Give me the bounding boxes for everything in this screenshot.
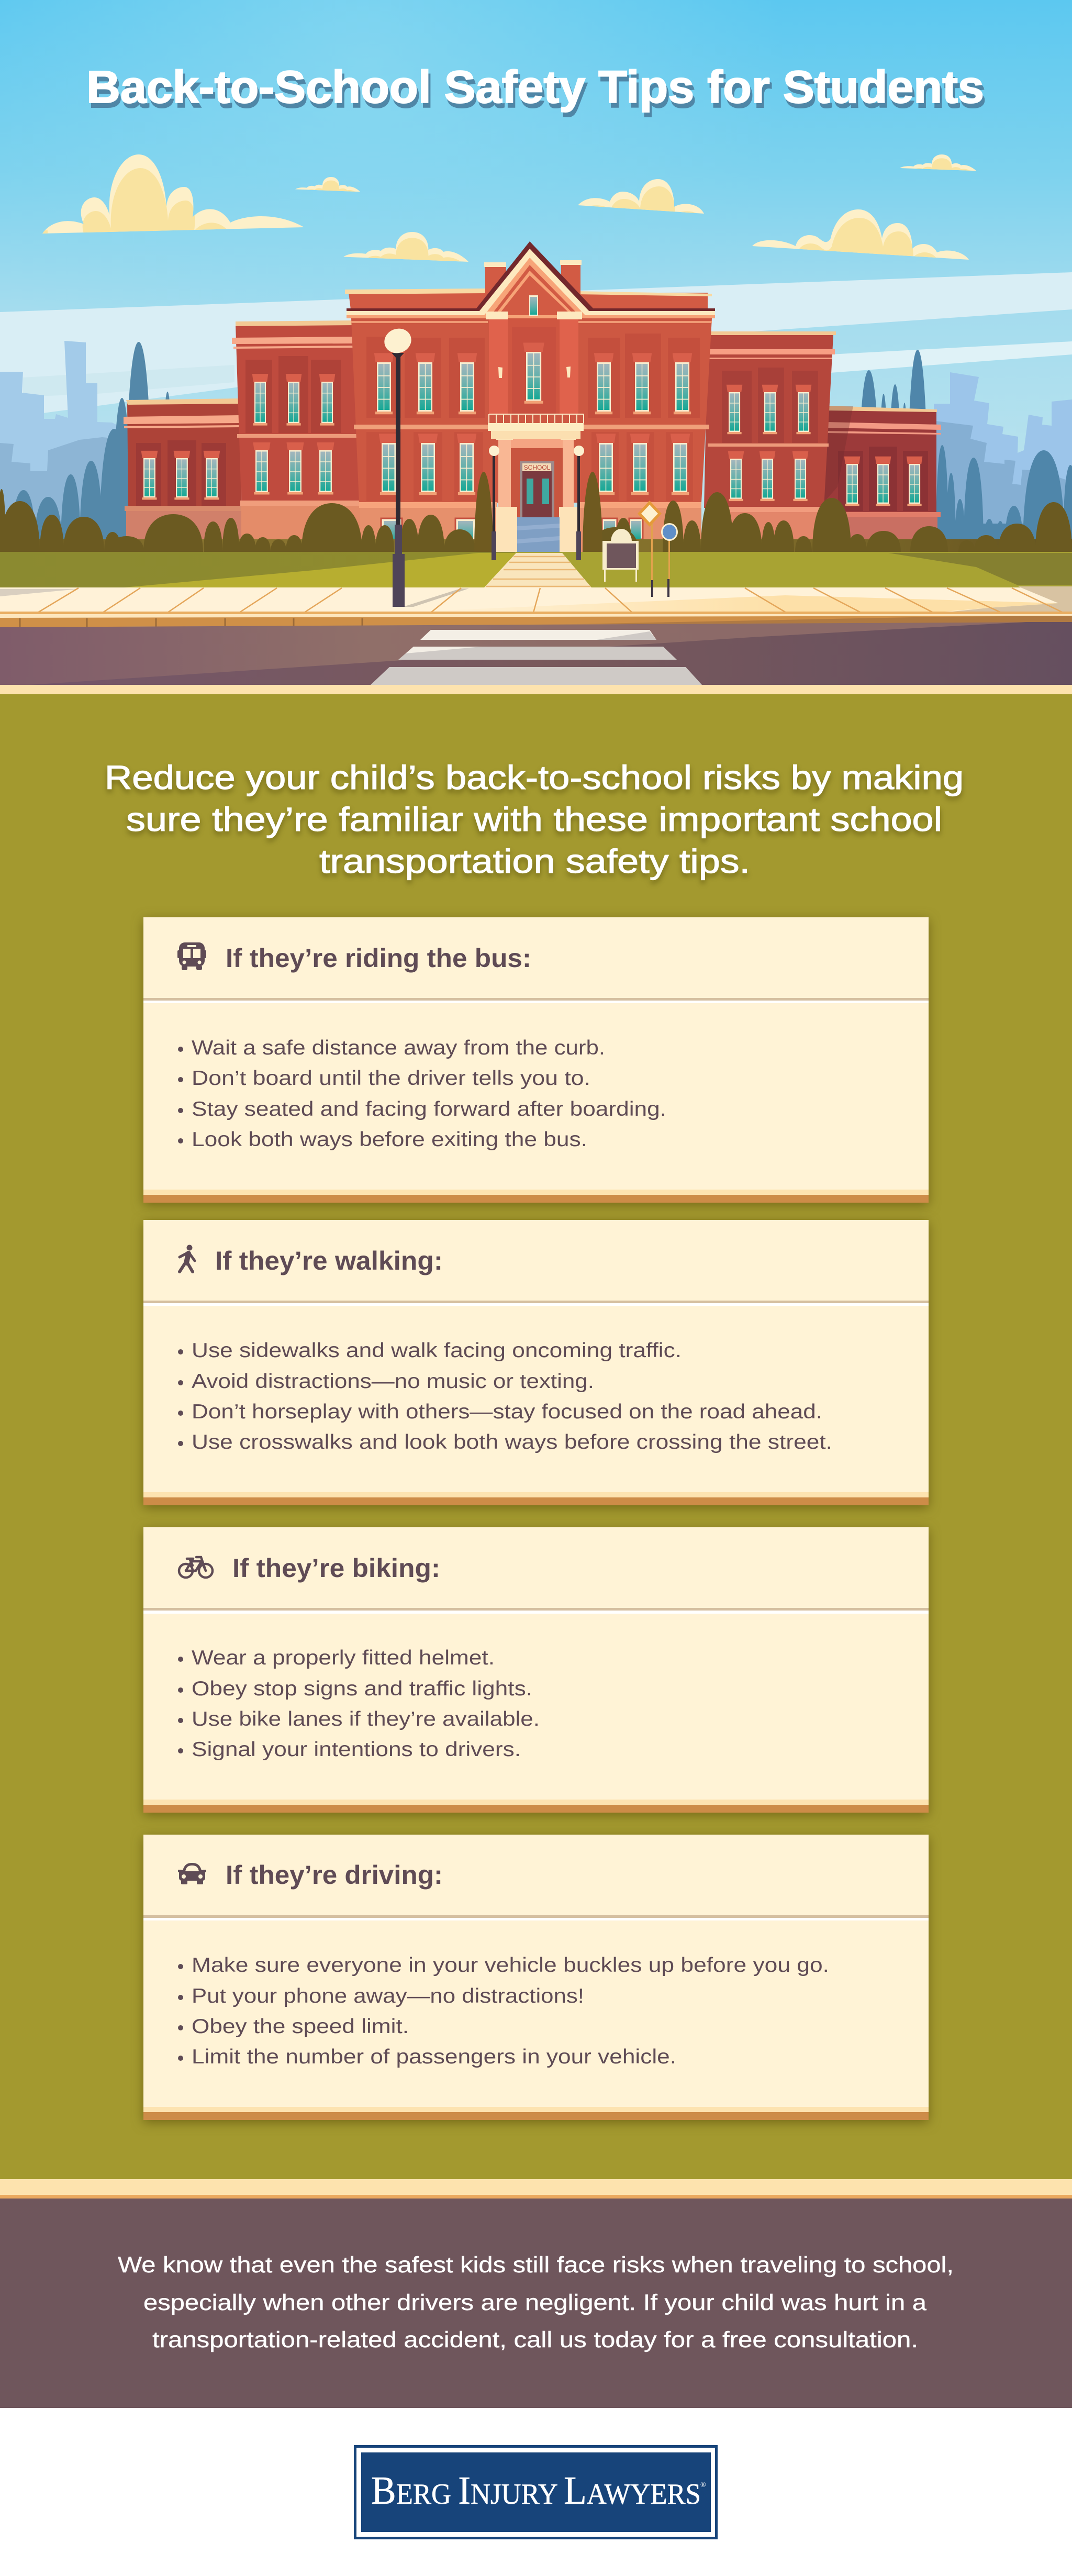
panel: biking [143, 1527, 929, 1813]
tips list: Stay seated and facing forward after boarding. [192, 1098, 666, 1120]
icon: car [178, 1863, 206, 1884]
heading: If they’re walking: [215, 1246, 443, 1275]
closing text [118, 2252, 954, 2352]
tips list: Use sidewalks and walk facing oncoming traffic. [192, 1339, 682, 1362]
heading: If they’re riding the bus: [226, 943, 531, 973]
sidewalk and curb [0, 586, 1072, 627]
tips list: Wait a safe distance away from the curb. [192, 1037, 605, 1059]
tips list: Look both ways before exiting the bus. [192, 1128, 587, 1151]
tips list: Avoid distractions—no music or texting. [192, 1370, 594, 1393]
intro text [105, 759, 964, 880]
tips list [178, 1037, 666, 1151]
logo: Berg Injury Lawyers: BERG INJURY LAWYERS [371, 2469, 701, 2513]
heading: If they’re driving: [226, 1860, 443, 1890]
door with school sign: SCHOOL [524, 464, 551, 471]
tips list: Make sure everyone in your vehicle buckles up before you go. [192, 1954, 829, 1977]
balcony railing [489, 414, 584, 423]
tips list: Limit the number of passengers in your vehicle. [192, 2046, 676, 2068]
tips list: Obey the speed limit. [192, 2015, 409, 2038]
cloud: small upper left [295, 177, 360, 192]
tips list: Don’t horseplay with others—stay focused on the road ahead. [192, 1401, 822, 1423]
door with school sign [520, 461, 554, 517]
cloud: large right [752, 209, 969, 260]
logo: Berg Injury Lawyers: ® [700, 2481, 706, 2489]
heading: If they’re biking: [232, 1553, 440, 1583]
gable [474, 241, 596, 319]
intro text: Reduce your child’s back-to-school risks by making [105, 759, 964, 796]
cloud: lower centre [343, 232, 468, 262]
cream divider band below hero [0, 685, 1072, 694]
tips list: Use bike lanes if they’re available. [192, 1708, 540, 1730]
title: Back-to-School Safety Tips for Students [86, 62, 984, 113]
tips list [178, 1954, 829, 2068]
building: central block [345, 241, 715, 552]
tips list: Use crosswalks and look both ways before crossing the street. [192, 1431, 832, 1453]
lawn [0, 552, 1072, 589]
skyline: left [0, 341, 136, 552]
closing text: transportation-related accident, call us today for a free consultation. [152, 2327, 918, 2352]
closing text: especially when other drivers are negligent. If your child was hurt in a [143, 2290, 926, 2315]
lamp posts [381, 325, 584, 607]
icon: bicycle [179, 1557, 213, 1578]
footer call-to-action panel [0, 2199, 1072, 2408]
building: middle left wing [232, 320, 366, 552]
tips list: Don’t board until the driver tells you to. [192, 1067, 590, 1090]
closing text: We know that even the safest kids still face risks when traveling to school, [118, 2252, 954, 2278]
entrance portico [488, 414, 584, 552]
building: middle right wing [704, 331, 836, 552]
panel: riding the bus [143, 917, 929, 1203]
cloud: middle [578, 179, 704, 214]
windows [141, 342, 922, 542]
signs: notice board, diamond and round signs [602, 501, 678, 597]
olive content background [0, 694, 1072, 2179]
shrubs [0, 472, 1072, 634]
tips list: Put your phone away—no distractions! [192, 1985, 584, 2007]
tips list: Obey stop signs and traffic lights. [192, 1678, 532, 1700]
walkway [484, 553, 591, 587]
cypress trees by entrance [474, 472, 602, 552]
background trees [12, 342, 1072, 552]
tips list: Signal your intentions to drivers. [192, 1738, 521, 1761]
footer divider bands [0, 2179, 1072, 2199]
panel: driving [143, 1835, 929, 2120]
cloud: large left [42, 154, 304, 234]
cloud: small top right [900, 154, 976, 171]
building: outer left wing [124, 398, 242, 552]
panel: walking [143, 1220, 929, 1505]
intro text: transportation safety tips. [319, 842, 750, 880]
skyline: right [934, 372, 1072, 552]
tips list: Wear a properly fitted helmet. [192, 1647, 495, 1669]
icon: bus [177, 942, 206, 970]
intro text: sure they’re familiar with these important school [126, 801, 942, 838]
road with crosswalk [0, 622, 1072, 686]
tips list [178, 1647, 540, 1761]
white footer background [0, 2408, 1072, 2576]
logo: Berg Injury Lawyers [354, 2445, 718, 2539]
building: outer right wing [817, 406, 941, 552]
hero illustration: school scene [0, 0, 1072, 686]
tips list [178, 1339, 832, 1453]
icon: walking person [180, 1245, 195, 1272]
